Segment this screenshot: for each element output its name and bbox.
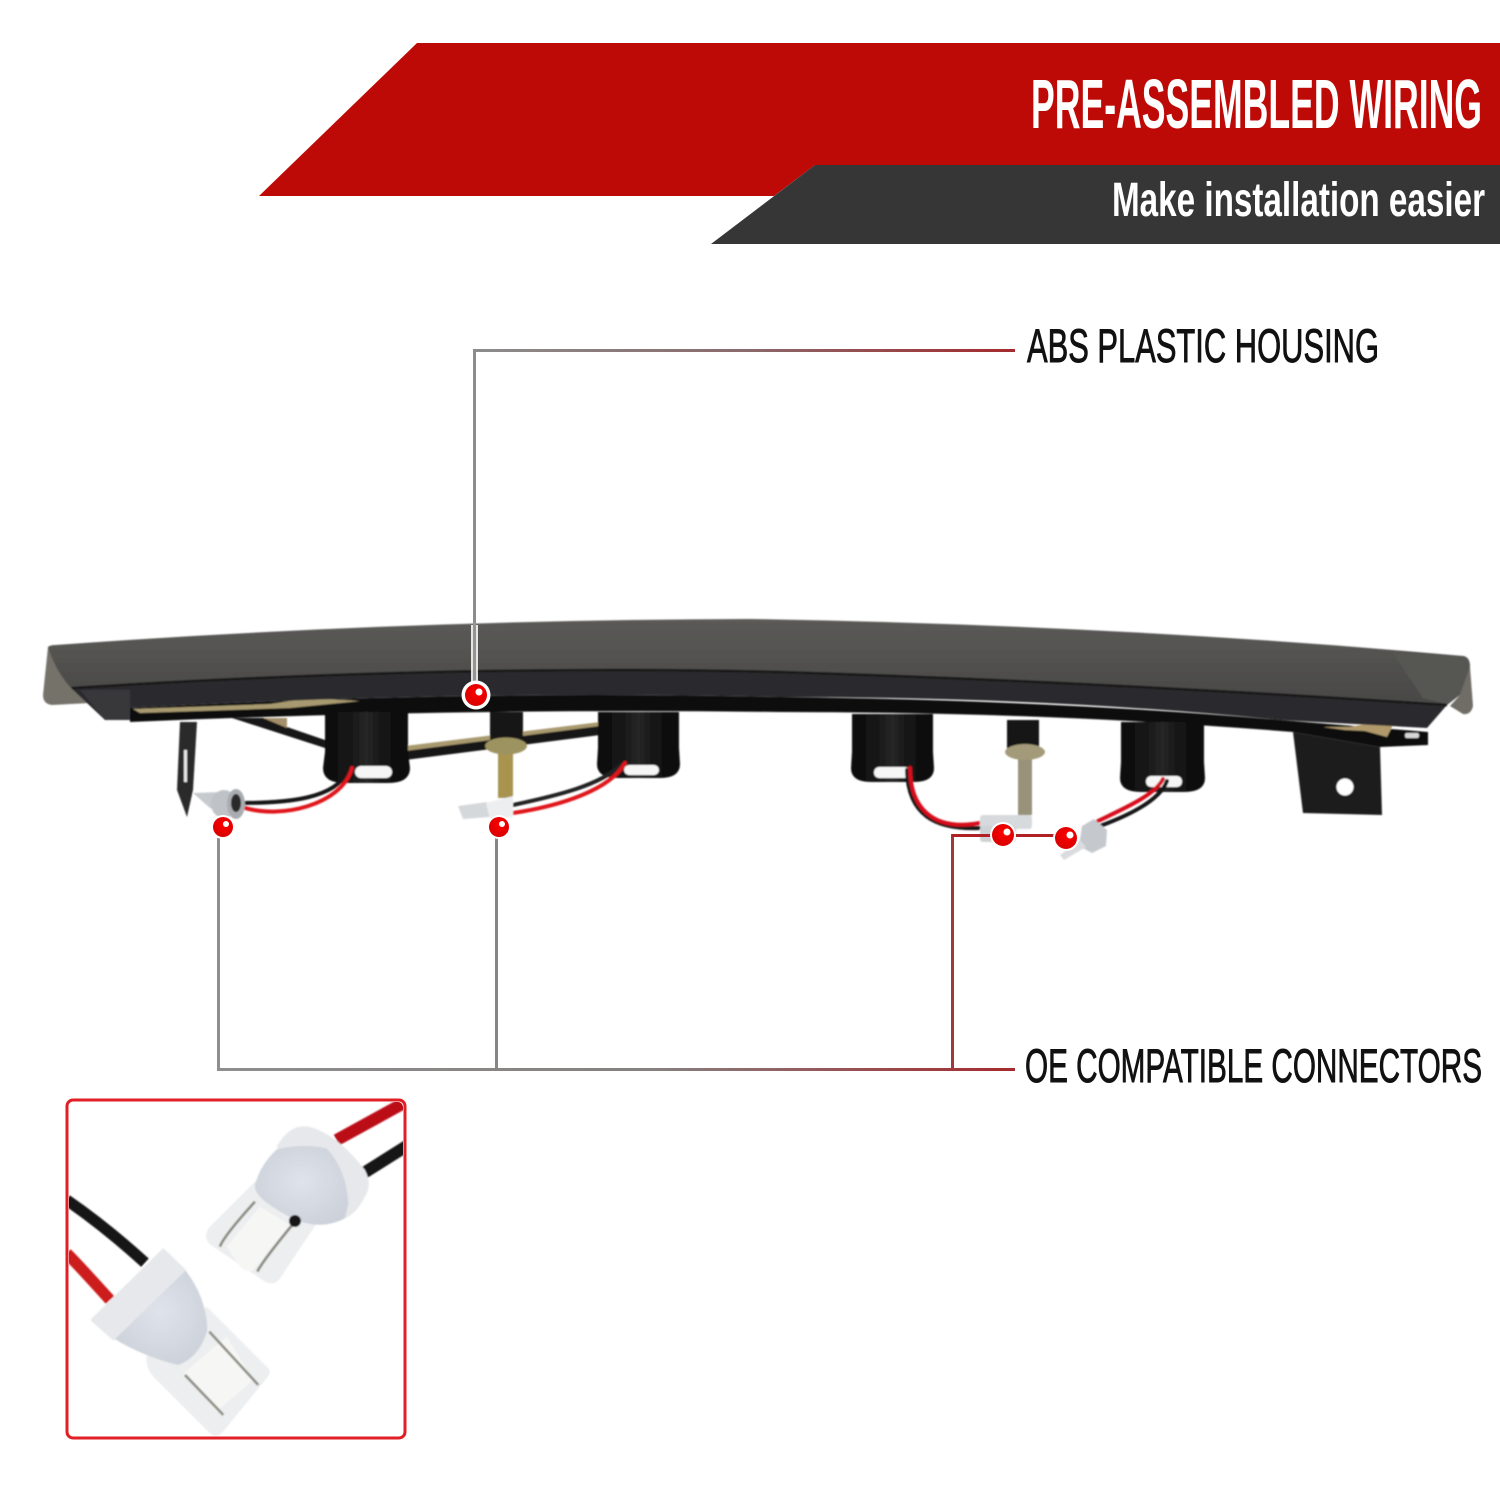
lower connector wires xyxy=(67,1200,145,1300)
tan on brace xyxy=(405,722,600,751)
upper connector wires xyxy=(337,1101,408,1173)
lower connector base xyxy=(146,1307,270,1436)
mounting stud left xyxy=(490,712,523,744)
white speck xyxy=(1405,733,1419,738)
small connector 4 xyxy=(1060,819,1107,860)
lower connector dome xyxy=(113,1268,207,1365)
header banner: red xyxy=(259,43,1500,196)
callout dot: housing xyxy=(462,680,490,710)
wires 1 xyxy=(242,768,352,812)
mounting stud right xyxy=(1007,720,1039,750)
left brace tan xyxy=(263,718,287,728)
wires 4 xyxy=(1098,779,1167,826)
top surface xyxy=(48,619,1470,705)
upper connector flange xyxy=(277,1126,369,1218)
seam xyxy=(72,670,1447,705)
right bracket xyxy=(1293,732,1382,815)
wires 3 xyxy=(907,768,980,828)
tan cardboard strip xyxy=(133,698,360,713)
small connector 2 xyxy=(458,796,513,819)
left end lip xyxy=(43,647,90,705)
inset panel: connector close-up xyxy=(67,1100,408,1438)
cardboard strip right xyxy=(1323,724,1393,737)
right bracket hole xyxy=(1336,778,1354,796)
socket cylinder 4 xyxy=(1120,722,1205,792)
socket cylinder 1 xyxy=(323,712,410,783)
upper connector hole xyxy=(289,1215,301,1227)
connector red link xyxy=(952,834,1065,837)
callout lines: connectors xyxy=(218,836,1065,1070)
wires 2 xyxy=(513,763,625,813)
callout dot: connector 4 xyxy=(1053,825,1079,851)
bolt right xyxy=(1005,744,1045,815)
small connector 1 xyxy=(193,789,245,819)
socket cylinder 2 xyxy=(597,712,680,778)
right end lip xyxy=(1450,667,1473,714)
right facet xyxy=(1393,653,1470,704)
callout line: housing halo xyxy=(471,625,478,684)
upper connector dome xyxy=(255,1146,348,1225)
left brace xyxy=(232,718,325,748)
socket cylinder 3 xyxy=(851,714,934,782)
band left end grey xyxy=(80,690,130,720)
dark front band xyxy=(70,670,1447,728)
callout dot: connector 1 xyxy=(211,815,235,839)
left bracket slot xyxy=(184,750,187,782)
inset frame fill xyxy=(67,1100,405,1438)
callout dot: connector 2 xyxy=(487,815,511,839)
callout line: ABS plastic housing (horizontal) xyxy=(474,350,1015,640)
inset red border xyxy=(67,1100,405,1438)
lower connector flange xyxy=(92,1249,185,1339)
dark base rail xyxy=(130,695,1428,747)
small connector 3 xyxy=(980,815,1032,842)
inset connectors xyxy=(67,1101,408,1436)
bolt left xyxy=(485,738,527,798)
callout line over housing xyxy=(473,622,476,684)
header banner: dark xyxy=(711,165,1500,244)
left bracket xyxy=(177,722,197,817)
upper connector base xyxy=(206,1180,317,1284)
brace between cylinders xyxy=(405,723,600,760)
product: third brake light housing xyxy=(43,619,1473,860)
callout dot: connector 3 xyxy=(990,822,1016,848)
